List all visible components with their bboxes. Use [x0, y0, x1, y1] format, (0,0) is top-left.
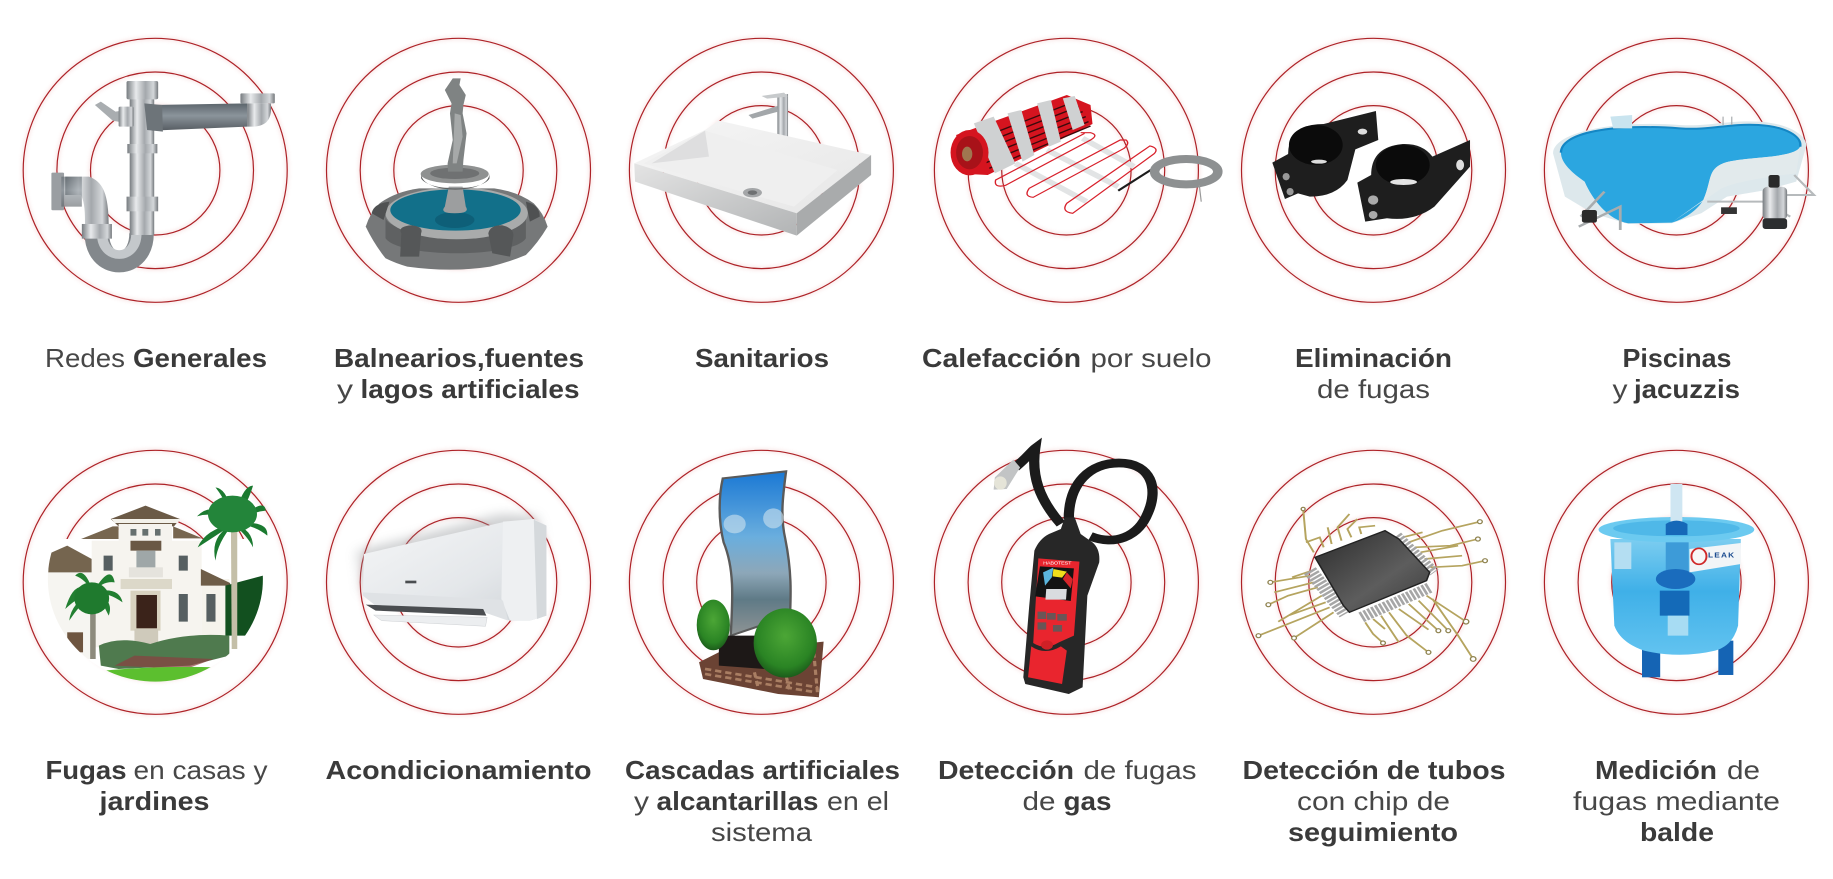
rings — [629, 38, 893, 302]
label: Detección de fugas de gas: gas — [1064, 786, 1112, 816]
rings — [1242, 450, 1506, 714]
rings — [23, 38, 287, 302]
icon: gas detector — [994, 448, 1153, 694]
rings — [934, 38, 1198, 302]
label: Sanitarios: Sanitarios — [695, 343, 829, 373]
label: Piscinas y jacuzzis: jacuzzis — [1633, 374, 1740, 404]
panel: Medición de fugas mediante balde — [1544, 450, 1808, 714]
panel: Cascadas artificiales — [629, 450, 893, 714]
label: Cascadas artificiales y alcantarillas en el sistema — [625, 755, 900, 847]
rings — [1544, 38, 1808, 302]
label: Piscinas y jacuzzis: Piscinas — [1622, 343, 1732, 373]
label: Piscinas y jacuzzis: y — [1612, 374, 1628, 404]
label: Detección de tubos con chip de seguimiento: seguimiento — [1288, 817, 1458, 847]
label: Balnearios, fuentes y lagos artificiales: lagos artificiales — [360, 374, 580, 404]
icon: bucket: LEAK — [1708, 551, 1735, 559]
icon: air conditioner — [358, 514, 546, 626]
labels row 1 — [45, 343, 1740, 404]
label: Detección de fugas de gas: de — [1022, 786, 1056, 816]
panel: Calefacción por suelo — [934, 38, 1218, 302]
label: Detección de fugas de gas: Detección — [938, 755, 1074, 785]
icon: fountain — [366, 78, 548, 270]
rings — [326, 450, 590, 714]
label: Eliminación de fugas: Eliminación — [1295, 343, 1452, 373]
icon: pipes — [51, 81, 275, 262]
label: Medición de fugas mediante balde: de — [1727, 755, 1760, 785]
label: Detección de tubos con chip de seguimiento: Detección de tubos — [1242, 755, 1506, 785]
icon: bucket — [1599, 484, 1754, 677]
label: Balnearios, fuentes y lagos artificiales — [334, 343, 584, 404]
label: Fugas en casas y jardines: en casas y — [134, 755, 268, 785]
label: Detección de fugas de gas — [938, 755, 1196, 816]
label: Cascadas artificiales y alcantarillas en el sistema: y — [634, 786, 649, 816]
label: Eliminación de fugas — [1295, 343, 1452, 404]
label: Redes Generales — [45, 343, 267, 373]
icon: chip — [1256, 507, 1487, 661]
icon: house — [47, 486, 267, 683]
label: Fugas en casas y jardines: Fugas — [46, 755, 126, 785]
label: Detección de tubos con chip de seguimiento: con chip de — [1297, 786, 1450, 816]
label: Medición de fugas mediante balde: balde — [1640, 817, 1714, 847]
panel: Redes Generales — [23, 38, 287, 302]
panel: Fugas en casas y jardines — [23, 450, 287, 714]
label: Fugas en casas y jardines — [46, 755, 268, 816]
label: Eliminación de fugas: de fugas — [1317, 374, 1430, 404]
label: Cascadas artificiales y alcantarillas en el sistema: sistema — [711, 817, 813, 847]
label: Cascadas artificiales y alcantarillas en el sistema: alcantarillas — [656, 786, 818, 816]
label: Cascadas artificiales y alcantarillas en el sistema: Cascadas artificiales — [625, 755, 900, 785]
label: Redes Generales: Generales — [133, 343, 267, 373]
rings — [934, 450, 1198, 714]
label: Detección de tubos con chip de seguimiento — [1242, 755, 1506, 847]
rings — [326, 38, 590, 302]
panel: Acondicionamiento — [326, 450, 590, 714]
panel: Piscinas y jacuzzis — [1544, 38, 1814, 302]
label: Balnearios, fuentes y lagos artificiales: Balnearios,fuentes — [334, 343, 584, 373]
label: Medición de fugas mediante balde: fugas mediante — [1573, 786, 1780, 816]
panel: Balnearios — [326, 38, 590, 302]
panel: Detección de tubos con chip — [1242, 450, 1506, 714]
label: Acondicionamiento: Acondicionamiento — [326, 755, 592, 785]
label: Piscinas y jacuzzis — [1612, 343, 1740, 404]
panel: Eliminación de fugas — [1242, 38, 1506, 302]
icon: pool — [1553, 115, 1814, 230]
label: Detección de fugas de gas: de fugas — [1084, 755, 1196, 785]
icon: sink — [634, 93, 871, 236]
rings — [1242, 38, 1506, 302]
rings — [1544, 450, 1808, 714]
label: Calefacción por suelo: Calefacción — [922, 343, 1081, 373]
label: Fugas en casas y jardines: jardines — [98, 786, 210, 816]
labels row 2 — [46, 755, 1780, 847]
label: Calefacción por suelo — [922, 343, 1212, 373]
rings — [23, 450, 287, 714]
panel: Detección de fugas de gas — [934, 448, 1198, 714]
icon: gas detector: HABOTEST — [1043, 561, 1072, 566]
icon: clamps — [1272, 111, 1470, 222]
icon: water cascade — [697, 471, 824, 697]
label: Medición de fugas mediante balde: Medición — [1595, 755, 1717, 785]
label: Medición de fugas mediante balde — [1573, 755, 1780, 847]
label: Calefacción por suelo: por suelo — [1090, 343, 1212, 373]
rings — [629, 450, 893, 714]
panel: Sanitarios — [629, 38, 893, 302]
icon: heating mat — [951, 95, 1218, 213]
label: Cascadas artificiales y alcantarillas en el sistema: en el — [827, 786, 889, 816]
label: Balnearios, fuentes y lagos artificiales: y — [337, 374, 353, 404]
label: Redes Generales: Redes — [45, 343, 125, 373]
